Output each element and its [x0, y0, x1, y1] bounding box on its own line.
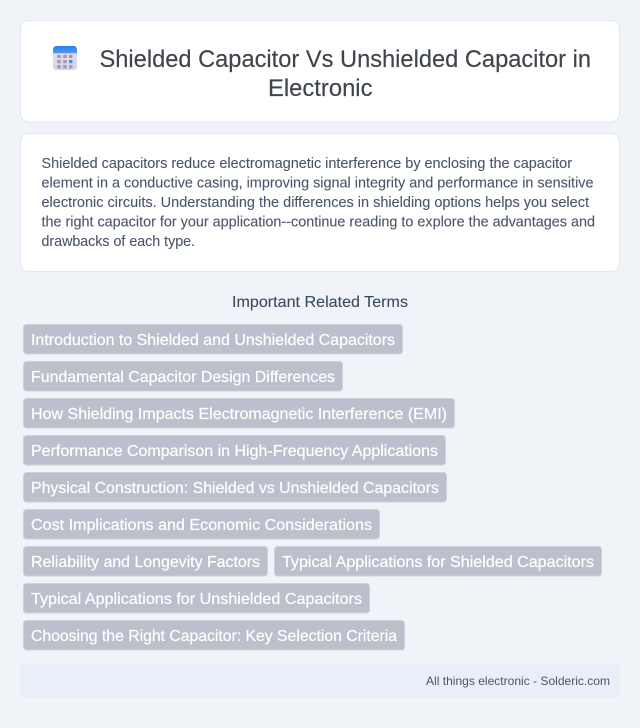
footer text: All things electronic - Solderic.com	[426, 674, 610, 688]
tag: cost	[24, 510, 380, 539]
tag: physical construction	[24, 472, 446, 502]
tag: high-frequency performance	[24, 436, 446, 465]
panel: introduction	[20, 134, 620, 272]
tag: EMI: How Shielding Impacts Electromagnetic Interference (EMI)	[31, 406, 447, 423]
tag: introduction: Introduction to Shielded and Unshielded Capacitors	[31, 332, 395, 349]
tag: cost: Cost Implications and Economic Considerations	[31, 517, 372, 534]
tag: EMI	[24, 398, 454, 428]
tag list	[24, 324, 602, 650]
tag: shielded applications	[274, 546, 602, 576]
icon: calendar	[53, 46, 77, 70]
tag: selection criteria: Choosing the Right Capacitor: Key Selection Criteria	[31, 628, 397, 645]
tag: unshielded applications: Typical Applications for Unshielded Capacitors	[31, 591, 362, 608]
text block: introduction paragraph: electronic circuits. Understanding the differences in shielding options helps you select	[42, 195, 589, 211]
tag: selection criteria	[24, 620, 404, 650]
title: Electronic	[268, 75, 372, 102]
tag: design differences: Fundamental Capacitor Design Differences	[31, 369, 335, 386]
tag: high-frequency performance: Performance Comparison in High-Frequency Applications	[31, 443, 438, 460]
heading: important related terms: Important Related Terms	[232, 294, 408, 311]
tag: unshielded applications	[24, 584, 370, 613]
text block: introduction paragraph: drawbacks of each type.	[42, 234, 195, 250]
tag: reliability	[24, 546, 268, 576]
footer	[20, 664, 620, 698]
tag: shielded applications: Typical Applications for Shielded Capacitors	[282, 554, 594, 571]
title: Shielded Capacitor Vs Unshielded Capacitor in	[100, 46, 591, 73]
tag: physical construction: Physical Construction: Shielded vs Unshielded Capacitors	[31, 480, 439, 497]
text block: introduction paragraph: the right capacitor for your application--continue reading to explore the advantages and	[42, 214, 595, 230]
tag: reliability: Reliability and Longevity Factors	[31, 554, 260, 571]
panel: title card	[20, 20, 620, 122]
text block: introduction paragraph: element in a conductive casing, improving signal integrity and performance in sensitive	[42, 176, 594, 192]
tag: design differences	[24, 362, 342, 391]
tag: introduction	[24, 324, 402, 354]
text block: introduction paragraph: Shielded capacitors reduce electromagnetic interference by enclosing the capacitor	[42, 156, 572, 172]
